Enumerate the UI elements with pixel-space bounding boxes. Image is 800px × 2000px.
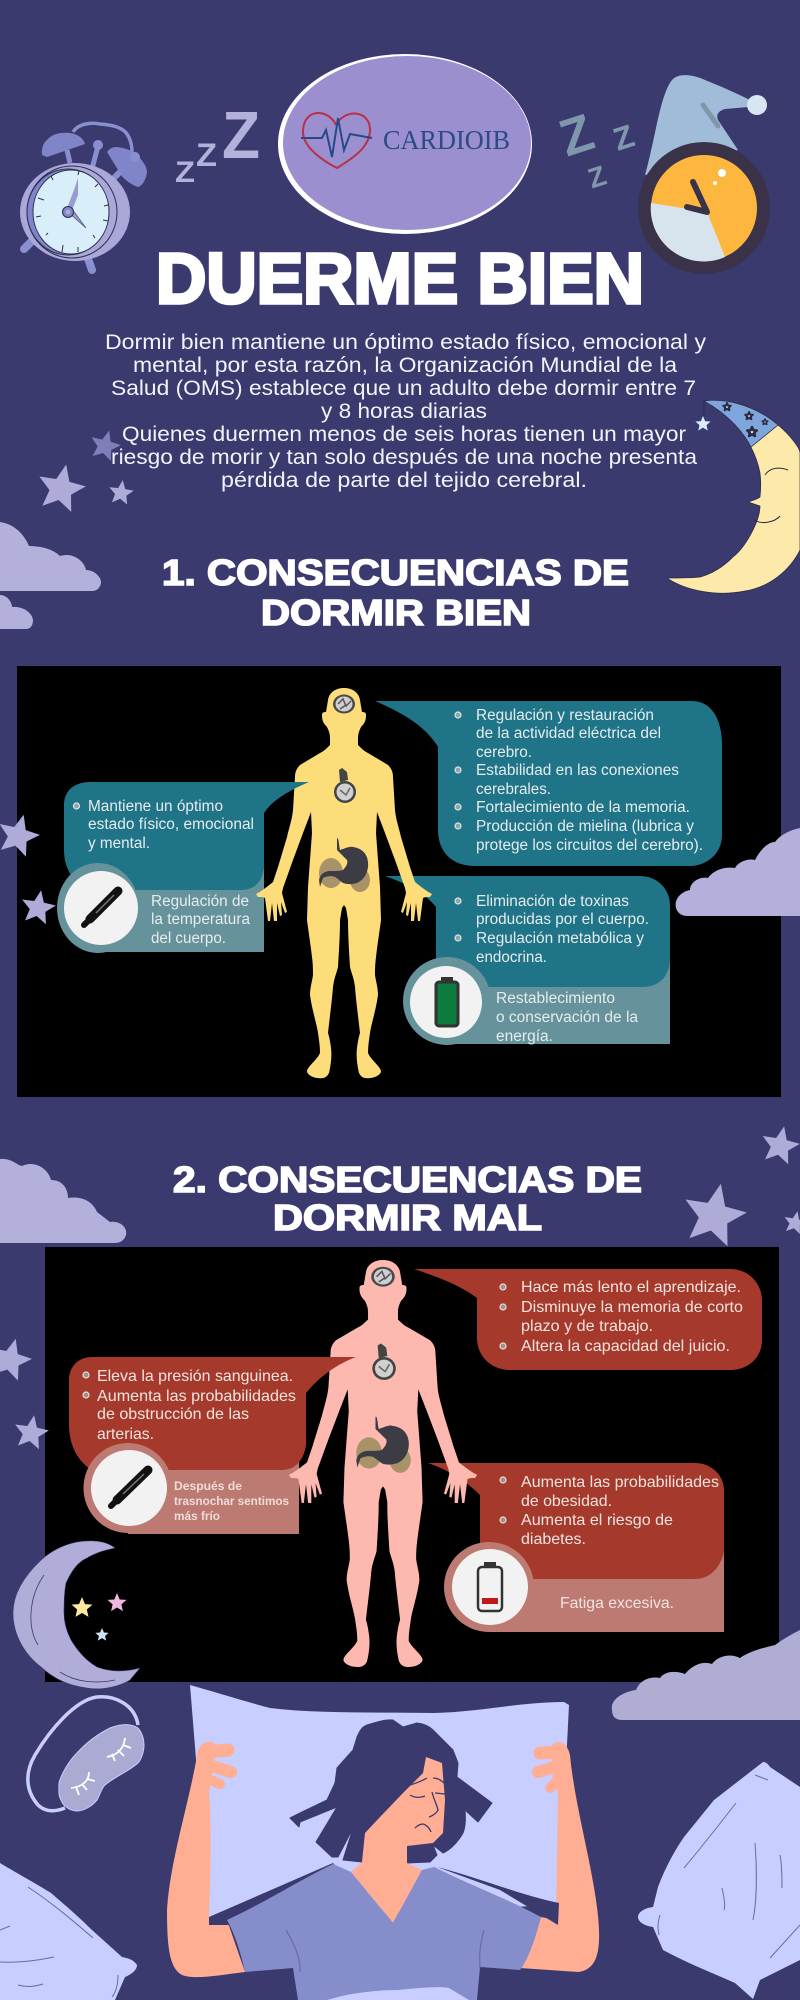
icon: alarm clock: [20, 123, 147, 270]
icon: z letters right: Z: [609, 117, 638, 158]
cloud: left of heading 2: [0, 1159, 126, 1243]
cloud: right of panel 1: [676, 828, 800, 916]
pillow: [190, 1685, 569, 1920]
callout: brain: [375, 701, 722, 866]
callout: organs and energy: Regulación metabólica y: [476, 930, 644, 947]
intro paragraph: pérdida de parte del tejido cerebral.: [221, 468, 587, 492]
callout: brain: Altera la capacidad del juicio.: [521, 1338, 730, 1355]
intro paragraph: y 8 horas diarias: [321, 399, 487, 423]
callout: brain: [414, 1269, 762, 1370]
callout: organs and energy: o conservación de la: [496, 1009, 638, 1026]
icon: thermometer: [84, 891, 118, 925]
icon: zzZ left: [175, 98, 260, 189]
callout: brain: plazo y de trabajo.: [521, 1318, 653, 1335]
hair: [290, 1720, 492, 1863]
logo heart: [303, 113, 370, 168]
callout: heart and cold: más frío: [174, 1511, 220, 1523]
figure: yellow body: [256, 688, 432, 1078]
callout: organs and energy: producidas por el cuerpo.: [476, 911, 649, 928]
icon: thermometer: [111, 1470, 148, 1506]
callout: organs and energy: Eliminación de toxinas: [476, 893, 629, 910]
callout: heart and temperature: la temperatura: [151, 911, 250, 928]
left arm: [167, 1742, 245, 1977]
figure: pink body: [289, 1260, 477, 1667]
callout: organs and fatigue: Fatiga excesiva.: [560, 1595, 674, 1612]
facial features: [407, 1778, 445, 1832]
callout: heart and temperature: [57, 782, 309, 953]
callout: heart and cold: Eleva la presión sanguinea.: [97, 1368, 293, 1385]
panel: consequences of sleeping well: [17, 666, 781, 1097]
heading: section 2: 2. CONSECUENCIAS DE: [173, 1159, 642, 1200]
heading: section 1: [162, 552, 629, 633]
callout: brain: cerebrales.: [476, 781, 551, 798]
heading: section 2: DORMIR MAL: [273, 1197, 542, 1238]
icon: clock with nightcap: [638, 75, 770, 274]
stars near intro: [34, 427, 135, 514]
callout: organs and energy: energía.: [496, 1028, 553, 1045]
callout: heart and temperature: y mental.: [88, 835, 150, 852]
intro paragraph: riesgo de morir y tan solo después de una noche presenta: [111, 445, 697, 469]
callout: organs and energy: endocrina.: [476, 949, 547, 966]
heading: section 2: [173, 1159, 642, 1238]
stars over panel 1: [0, 809, 58, 925]
icon: zzZ left: Z: [175, 156, 195, 189]
callout tail over the shoulder: [296, 1357, 356, 1393]
icon: z letters right: Z: [584, 160, 610, 194]
title: DUERME BIEN: [156, 240, 644, 319]
callout: brain: de la actividad eléctrica del: [476, 725, 661, 742]
callout: brain: Producción de mielina (lubrica y: [476, 818, 694, 835]
callout: organs and energy: [385, 876, 670, 1045]
callout: organs and fatigue: Aumenta las probabilidades: [521, 1474, 719, 1491]
callout: heart and cold: Después de: [174, 1481, 242, 1493]
intro paragraph: [105, 330, 706, 492]
heading: section 1: DORMIR BIEN: [261, 592, 531, 633]
icon: z letters right: Z: [553, 103, 601, 168]
icon: zzZ left: Z: [196, 137, 217, 173]
logo: cardioib: [278, 54, 532, 234]
panel: consequences of sleeping badly: [45, 1247, 779, 1682]
callout: heart and temperature: Mantiene un óptimo: [88, 798, 223, 815]
icon: full battery: [436, 977, 458, 1026]
icon: z letters right: [553, 103, 638, 194]
callout: brain: Hace más lento el aprendizaje.: [521, 1279, 741, 1296]
sheet: [327, 1987, 469, 2000]
callout: brain: Fortalecimiento de la memoria.: [476, 799, 690, 816]
callout: heart and cold: de obstrucción de las: [97, 1406, 249, 1423]
cloud: bottom right: [612, 1630, 800, 1720]
callout: organs and fatigue: Aumenta el riesgo de: [521, 1512, 673, 1529]
callout: heart and temperature: estado físico, emocional: [88, 816, 254, 833]
intro paragraph: Dormir bien mantiene un óptimo estado físico, emocional y: [105, 330, 706, 354]
icon: pillow bottom right: [638, 1762, 800, 1999]
logo name: CARDIOIB: [383, 125, 510, 155]
icon: empty battery: [478, 1562, 502, 1611]
callout: heart and cold: [69, 1357, 356, 1534]
shirt fold lines: [286, 1930, 484, 1972]
callout: brain: protege los circuitos del cerebro).: [476, 837, 703, 854]
intro paragraph: Salud (OMS) establece que un adulto debe dormir entre 7: [111, 376, 696, 400]
intro paragraph: mental, por esta razón, la Organización Mundial de la: [133, 353, 677, 377]
callout: brain: cerebro.: [476, 744, 532, 761]
icon: crescent moon with stars: [13, 1541, 140, 1689]
icon: zzZ left: Z: [222, 98, 260, 173]
icon: pillow bottom left: [0, 1863, 137, 2000]
callout: brain: Estabilidad en las conexiones: [476, 762, 679, 779]
callout: heart and temperature: Regulación de: [151, 893, 249, 910]
callout: organs and fatigue: [428, 1463, 724, 1632]
callout: organs and fatigue: diabetes.: [521, 1531, 586, 1548]
heading: section 1: 1. CONSECUENCIAS DE: [162, 552, 629, 593]
logo pulse line: [301, 118, 372, 157]
callout tail over the shoulder: [255, 782, 309, 813]
face, neck and chest: [351, 1757, 445, 1923]
callout: brain: Disminuye la memoria de corto: [521, 1299, 743, 1316]
callout: heart and cold: trasnochar sentimos: [174, 1496, 289, 1508]
stars left of panel 2: [0, 1333, 51, 1450]
cloud: top left: [0, 522, 101, 629]
shirt: [227, 1864, 541, 2000]
callout: heart and cold: Aumenta las probabilidades: [97, 1388, 296, 1405]
stars right of heading 2: [678, 1122, 800, 1249]
collar: [333, 1864, 437, 1875]
intro paragraph: Quienes duermen menos de seis horas tienen un mayor: [122, 422, 686, 446]
callout: heart and temperature: del cuerpo.: [151, 930, 226, 947]
illustration: woman lying on pillow: [167, 1685, 599, 2000]
shoulder shadows: [209, 1863, 559, 1925]
icon: sleeping moon with cap: [667, 400, 800, 593]
callout: organs and fatigue: de obesidad.: [521, 1493, 612, 1510]
callout: brain: Regulación y restauración: [476, 707, 654, 724]
right arm: [520, 1742, 599, 1972]
callout: organs and energy: Restablecimiento: [496, 990, 615, 1007]
icon: sleep mask: [28, 1697, 144, 1811]
callout: heart and cold: arterias.: [97, 1426, 154, 1443]
